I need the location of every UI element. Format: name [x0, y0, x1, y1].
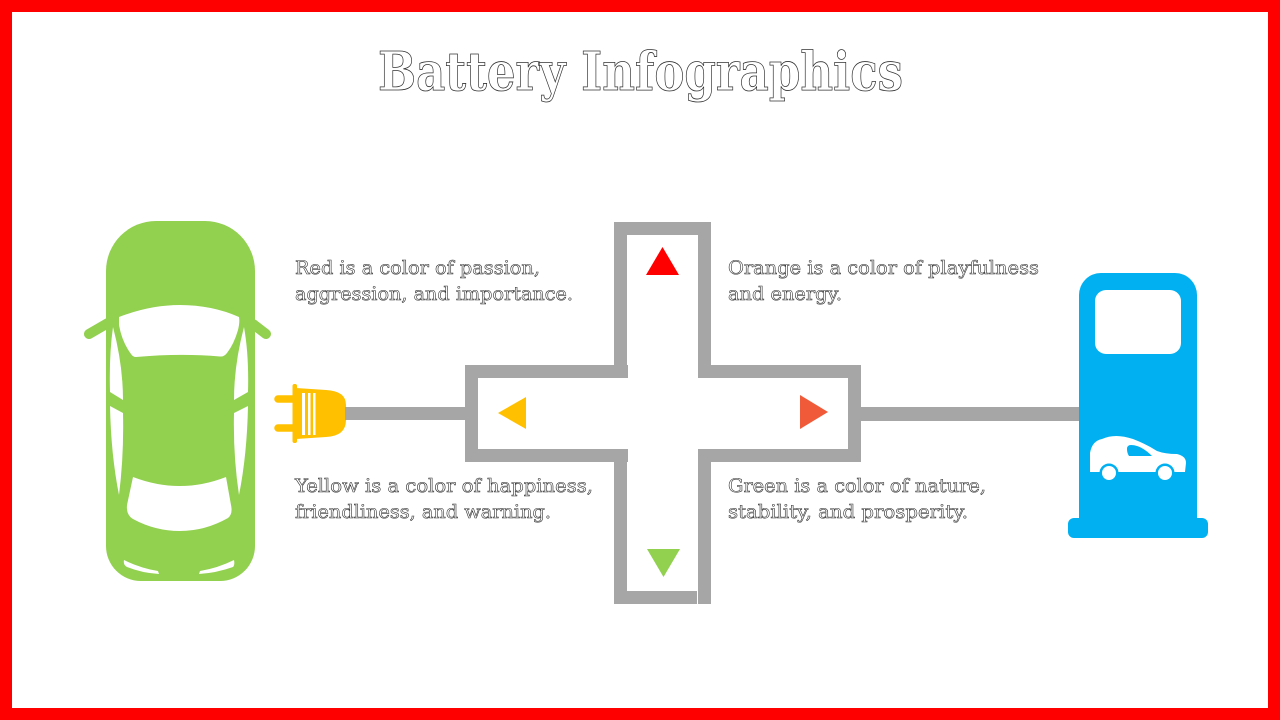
plug prongs [278, 399, 294, 428]
station base [1068, 518, 1208, 538]
icon: green car top view [89, 221, 266, 581]
text: red: Red is a color of passion, [295, 257, 540, 279]
text: red [295, 257, 573, 305]
yellow left arrow [498, 397, 526, 429]
rear wheel [1101, 465, 1117, 481]
text: red: aggression, and importance. [295, 283, 573, 305]
text: green: stability, and prosperity. [728, 501, 968, 523]
red up arrow [646, 247, 679, 275]
car silhouette [1090, 436, 1186, 472]
station body [1079, 273, 1197, 520]
plug flange [292, 384, 297, 443]
icon: yellow plug [278, 384, 346, 443]
text: yellow: Yellow is a color of happiness, [294, 475, 593, 497]
green down arrow [647, 549, 680, 577]
text: yellow [294, 475, 593, 523]
text: green: Green is a color of nature, [728, 475, 986, 497]
text: orange: and energy. [728, 283, 842, 305]
car mirrors [89, 323, 266, 334]
plug stripes [302, 393, 316, 435]
car body [106, 221, 255, 581]
text: orange [728, 257, 1039, 305]
title: Battery Infographics [378, 41, 903, 103]
gray cross outline [465, 222, 861, 604]
station screen [1095, 290, 1181, 354]
left cable [345, 407, 467, 420]
orange right arrow [800, 395, 828, 429]
plug body [296, 388, 346, 439]
station car icon [1090, 436, 1186, 481]
text: yellow: friendliness, and warning. [295, 501, 551, 523]
text: green [728, 475, 986, 523]
front wheel [1157, 465, 1173, 481]
car windows [110, 305, 248, 531]
icon: blue charging station [1068, 273, 1208, 538]
text: orange: Orange is a color of playfulness [728, 257, 1039, 279]
right cable [860, 407, 1081, 421]
car headlights [124, 560, 234, 574]
car window [1127, 445, 1152, 456]
